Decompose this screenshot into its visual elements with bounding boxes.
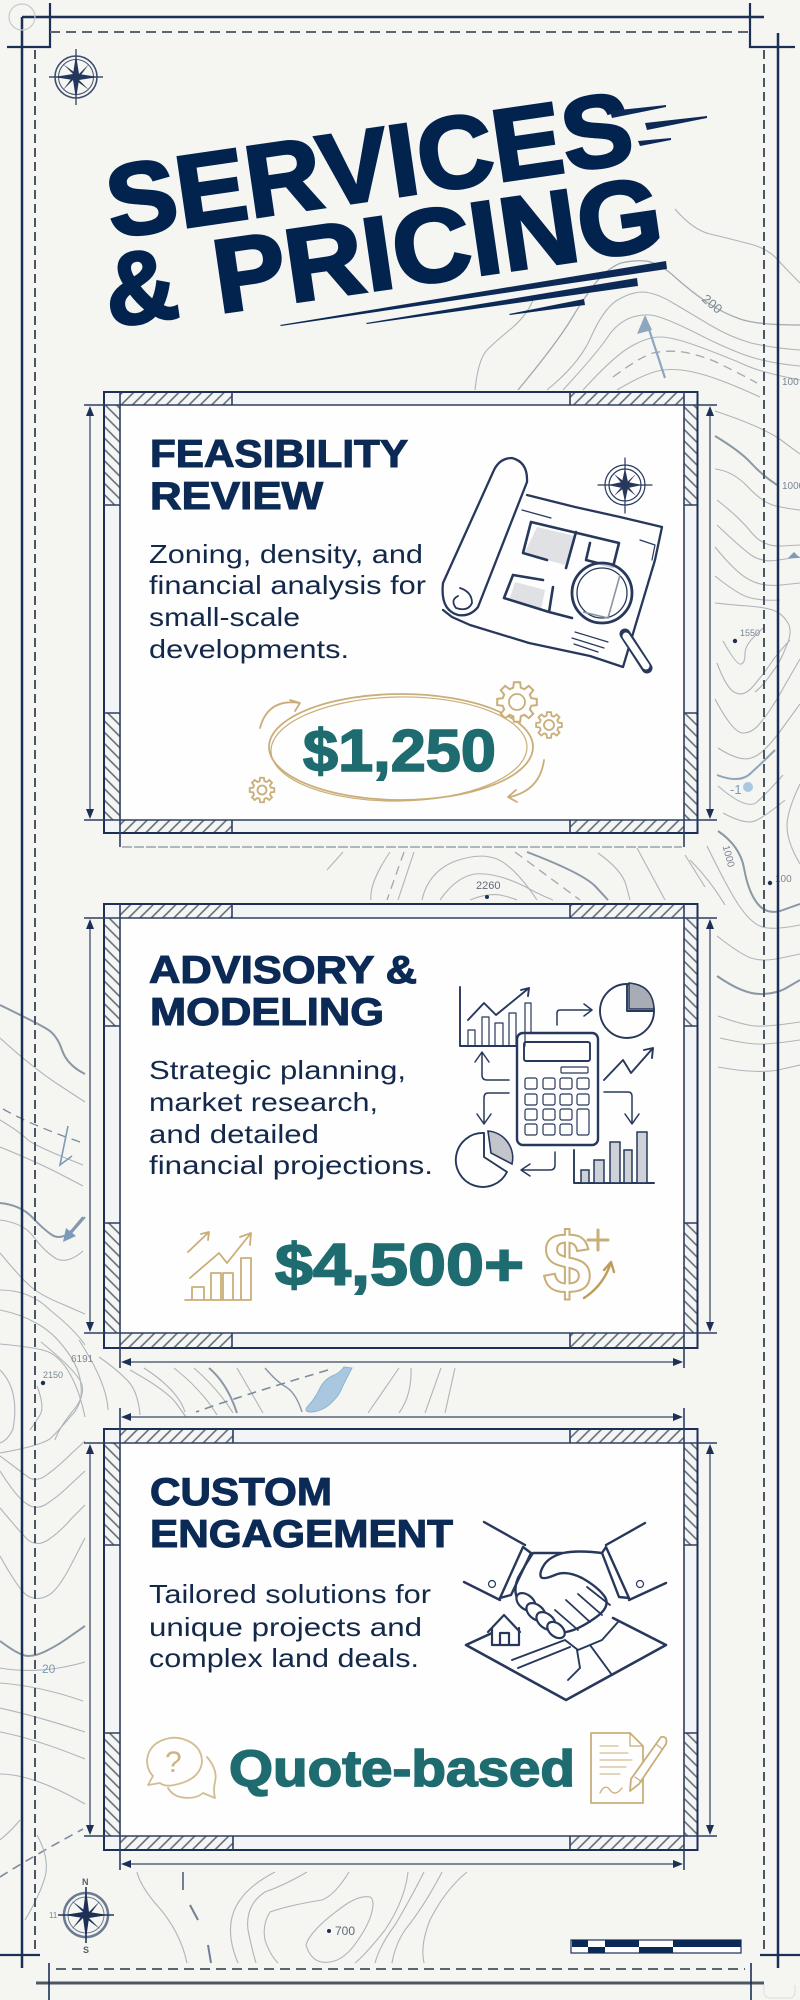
icon: gold document with pen xyxy=(591,1733,666,1803)
description: financial analysis for xyxy=(149,570,426,600)
icon: compass rose bottom left xyxy=(58,1877,114,1955)
map elevation labels: 2150 xyxy=(43,1370,63,1380)
description: financial projections. xyxy=(149,1150,433,1180)
description: developments. xyxy=(149,634,349,664)
heading: ADVISORY & xyxy=(149,949,417,992)
price: quote-based: Quote-based xyxy=(229,1740,575,1797)
description: Zoning, density, and xyxy=(149,539,423,569)
icon: compass rose top left xyxy=(49,49,103,105)
map elevation labels: 100 xyxy=(782,377,799,388)
heading: ENGAGEMENT xyxy=(150,1513,453,1556)
icon: compass rose bottom left: N xyxy=(82,1877,88,1887)
price: $4,500+ xyxy=(275,1232,524,1298)
description xyxy=(149,1055,433,1180)
icon: gold ellipse, gears and arrows xyxy=(250,682,562,803)
icon: gold dollar with plus and arrow: $ xyxy=(543,1216,591,1312)
heading: MODELING xyxy=(150,991,384,1034)
heading: REVIEW xyxy=(150,475,323,518)
title speed lines xyxy=(280,105,707,326)
icon: gold question speech bubbles xyxy=(147,1738,216,1798)
icon: calculator with charts and arrows xyxy=(456,983,654,1187)
description: market research, xyxy=(149,1087,378,1117)
title: Services & Pricing: & xyxy=(97,226,184,349)
description: Strategic planning, xyxy=(149,1055,406,1085)
heading: CUSTOM xyxy=(150,1471,332,1514)
heading xyxy=(150,433,408,518)
scale bar xyxy=(571,1940,741,1953)
title: Services & Pricing: PRICING xyxy=(206,156,670,336)
card frame xyxy=(84,904,717,1368)
map marks: lake and blue arrows xyxy=(41,315,800,1933)
description xyxy=(149,1579,431,1673)
map elevation labels: 100 xyxy=(775,874,792,885)
description xyxy=(149,539,426,664)
map elevation labels: 1000 xyxy=(720,844,736,869)
map elevation labels: 700 xyxy=(335,1924,355,1938)
map elevation labels: 6191 xyxy=(71,1354,94,1365)
map elevation labels: 2260 xyxy=(476,880,500,892)
icon: blueprint roll and magnifier xyxy=(443,458,662,668)
heading xyxy=(150,1471,453,1556)
card frame xyxy=(84,392,717,847)
title: Services & Pricing: SERVICES xyxy=(99,70,640,260)
icon: gold growth chart xyxy=(185,1232,251,1300)
icon: compass rose bottom left: S xyxy=(83,1945,89,1955)
card frame xyxy=(84,1408,717,1870)
map elevation labels: 200 xyxy=(699,291,725,317)
description: and detailed xyxy=(149,1119,319,1149)
map elevation labels: 20 xyxy=(42,1662,56,1676)
heading xyxy=(149,949,417,1034)
icon: handshake over land parcel xyxy=(464,1522,666,1700)
title: Services & Pricing xyxy=(97,70,670,349)
map elevation labels xyxy=(42,291,800,1938)
heading: FEASIBILITY xyxy=(150,433,408,476)
description: unique projects and xyxy=(149,1612,422,1642)
map elevation labels: -1 xyxy=(730,782,742,797)
map elevation labels: 11 xyxy=(49,1911,58,1920)
icon: gold question speech bubbles: ? xyxy=(165,1746,182,1779)
panel: feasibility review xyxy=(84,392,717,847)
map elevation labels: 1550 xyxy=(740,628,760,638)
description: complex land deals. xyxy=(149,1643,419,1673)
price: $1,250 xyxy=(303,718,496,784)
panel: custom engagement xyxy=(84,1408,717,1870)
description: Tailored solutions for xyxy=(149,1579,431,1609)
panel: advisory and modeling xyxy=(84,904,717,1368)
description: small-scale xyxy=(149,602,300,632)
icon: gold dollar with plus and arrow xyxy=(543,1216,614,1312)
